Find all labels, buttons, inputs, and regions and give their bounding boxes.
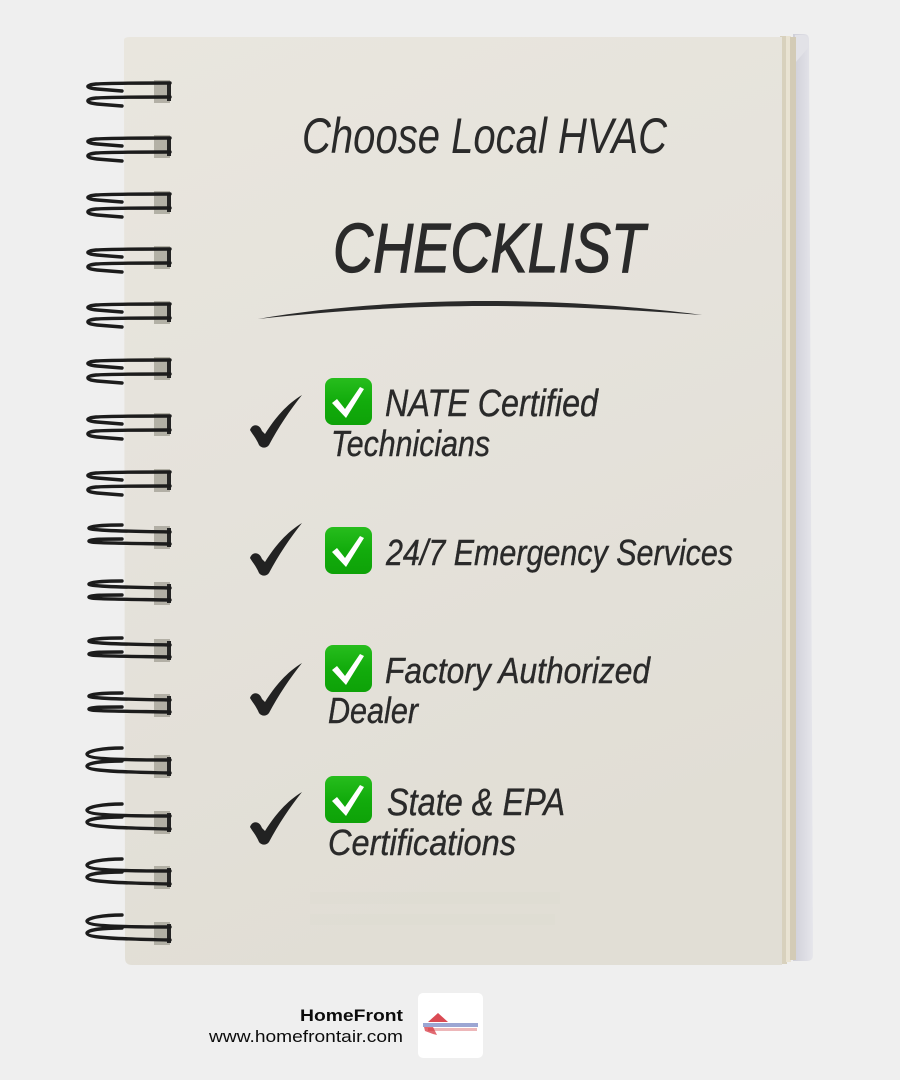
icon: green check box — [325, 776, 372, 823]
item text: Certifications — [328, 822, 516, 863]
tick icon — [250, 663, 302, 716]
back cover — [793, 34, 813, 961]
item text: Technicians — [331, 423, 490, 464]
item text: 24/7 Emergency Services — [385, 532, 733, 573]
heading: CHECKLIST: CHECKLIST — [333, 209, 648, 287]
item text — [328, 650, 651, 731]
tick icon — [250, 395, 302, 448]
title: Choose Local HVAC: Choose Local HVAC — [302, 108, 668, 164]
tick icon — [250, 523, 302, 576]
item text: NATE Certified — [385, 383, 600, 425]
icon: green check box — [325, 527, 372, 574]
item text — [328, 782, 565, 863]
footer brand text: HomeFront — [300, 1006, 403, 1025]
notebook — [124, 34, 813, 965]
icon: green check box — [325, 378, 372, 425]
front page — [124, 37, 782, 965]
checklist item: State and EPA — [250, 776, 565, 863]
tick icon — [250, 792, 302, 845]
icon: green check box — [325, 645, 372, 692]
footer brand text — [208, 1006, 403, 1046]
checklist item: 24/7 — [250, 523, 733, 576]
item text — [331, 383, 600, 464]
cover corner fold — [795, 35, 808, 63]
checklist item: Factory — [250, 645, 651, 731]
item text: Dealer — [328, 690, 420, 731]
footer brand text: www.homefrontair.com — [208, 1027, 403, 1046]
item text: Factory Authorized — [385, 650, 651, 691]
spiral binding — [87, 80, 171, 945]
footer logo — [418, 993, 483, 1058]
page stack edges — [780, 36, 796, 964]
checklist item: NATE — [250, 378, 600, 464]
item text: State & EPA — [387, 782, 565, 824]
underline swoosh — [258, 301, 702, 319]
